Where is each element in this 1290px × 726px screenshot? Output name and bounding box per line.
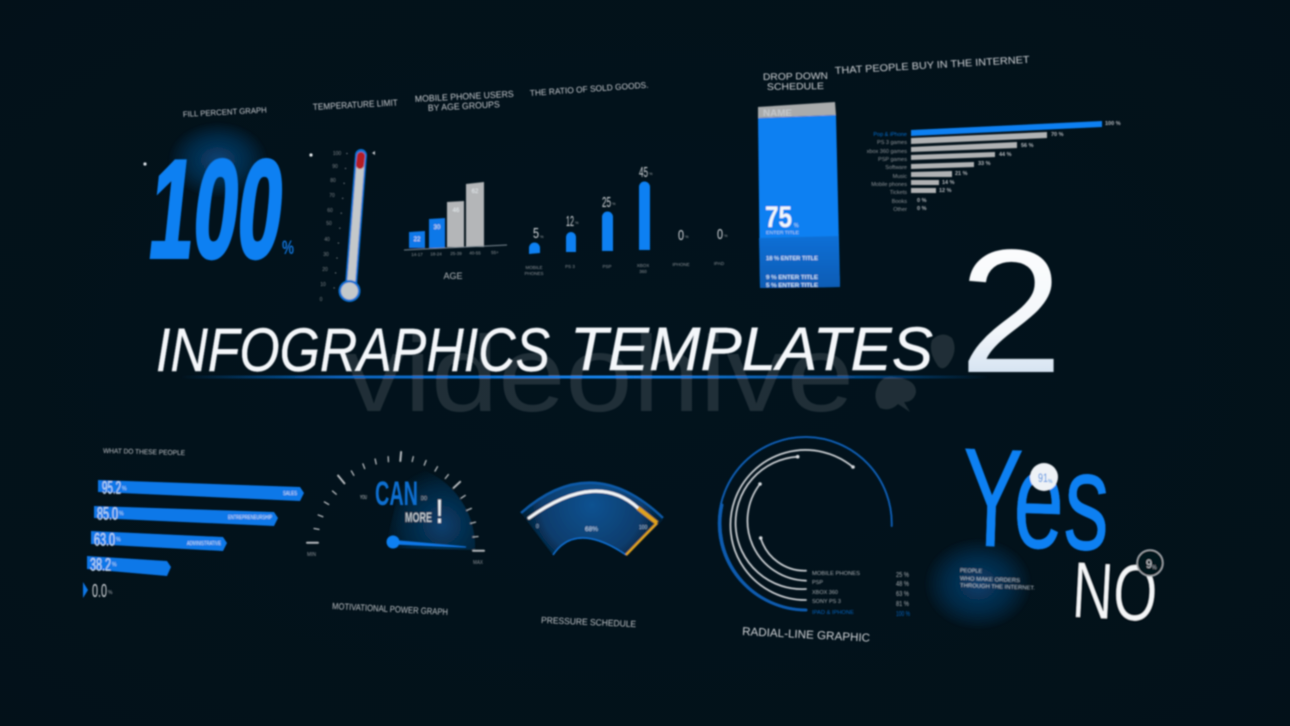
- chart: horizontal bars of purchases: PS 3 games: [877, 140, 907, 146]
- gauge: motivational power: MIN: [307, 552, 316, 558]
- gauge: pressure: 68%: [585, 527, 599, 533]
- chart: sold goods bars: 360: [639, 269, 647, 274]
- panel: thermometer: 60: [327, 208, 333, 214]
- heading: mobile phone users: MOBILE PHONE USERS: [415, 89, 514, 104]
- chart: radial lines: 25 %: [896, 572, 909, 579]
- panel: thermometer: 70: [329, 193, 335, 199]
- chart: sold goods bars: %: [575, 220, 579, 225]
- chart: age groups bars: 55+: [491, 250, 499, 255]
- panel: thermometer: 40: [324, 237, 330, 243]
- chart: sold goods bars: PS 3: [565, 264, 575, 269]
- gauge: motivational power: !: [436, 493, 443, 531]
- chart: horizontal bars of purchases: Mobile phones: [871, 182, 907, 188]
- heading: drop down schedule: DROP DOWN: [763, 71, 828, 83]
- panel: thermometer: [309, 151, 375, 303]
- gauge: motivational power: MORE: [405, 509, 432, 525]
- heading: temperature limit: TEMPERATURE LIMIT: [313, 98, 398, 112]
- chart: arrow bars: %: [116, 537, 121, 543]
- panel: thermometer: 0: [320, 297, 323, 303]
- title: TEMPLATES: [570, 315, 933, 383]
- panel: thermometer: 90: [332, 164, 338, 170]
- chart: sold goods bars: XBOX: [637, 263, 649, 268]
- caption: radial-line graphic: RADIAL-LINE GRAPHIC: [742, 626, 870, 645]
- chart: arrow bars: 95.2: [102, 478, 121, 498]
- heading: that people buy in the internet: THAT PEOPLE BUY IN THE INTERNET: [835, 55, 1030, 77]
- gauge: pressure: 0: [536, 524, 539, 530]
- chart: horizontal bars of purchases: [867, 121, 1121, 213]
- chart: radial lines: [719, 437, 910, 618]
- panel: drop down schedule: [758, 102, 840, 289]
- chart: sold goods bars: [524, 164, 728, 276]
- chart: horizontal bars of purchases: 56 %: [1021, 143, 1034, 149]
- chart: age groups bars: 25-39: [450, 251, 462, 256]
- panel: drop down schedule: %: [794, 223, 799, 229]
- gauge: pressure: 100: [639, 525, 648, 531]
- chart: sold goods bars: %: [649, 171, 653, 176]
- chart: arrow bars: ENTREPRENEURSHIP: [228, 515, 273, 521]
- chart: horizontal bars of purchases: Software: [885, 165, 907, 171]
- panel: thermometer: 50: [326, 221, 332, 227]
- caption: pressure schedule: PRESSURE SCHEDULE: [541, 615, 636, 629]
- panel: yes and no: %: [1048, 479, 1053, 485]
- panel: yes and no: 91: [1038, 471, 1048, 485]
- chart: arrow bars: 85.0: [97, 504, 118, 524]
- chart: arrow bars: 38.2: [90, 555, 111, 575]
- heading: what do these people: WHAT DO THESE PEOPLE: [103, 448, 185, 457]
- chart: arrow bars: [83, 478, 304, 601]
- chart: horizontal bars of purchases: 33 %: [978, 161, 991, 167]
- chart: arrow bars: %: [119, 511, 124, 517]
- panel: drop down schedule: 75: [765, 201, 792, 234]
- panel: yes and no: PEOPLE: [960, 568, 982, 575]
- chart: horizontal bars of purchases: PSP games: [878, 157, 907, 163]
- panel: fill percent graph: %: [282, 238, 294, 259]
- chart: arrow bars: %: [122, 486, 127, 492]
- panel: yes and no: WHO MAKE ORDERS: [960, 576, 1020, 584]
- chart: age groups bars: 40-55: [469, 250, 481, 256]
- chart: age groups bars: 30: [434, 225, 441, 231]
- chart: age groups bars: 22: [414, 237, 421, 243]
- panel: yes and no: THROUGH THE INTERNET.: [960, 583, 1036, 592]
- chart: sold goods bars: IPHONE: [672, 262, 690, 267]
- panel: drop down schedule: NAME: [763, 108, 792, 118]
- heading: ratio of sold goods: THE RATIO OF SOLD GOODS.: [529, 80, 649, 98]
- panel: fill percent graph: [143, 122, 294, 287]
- heading: fill percent graph: FILL PERCENT GRAPH: [183, 106, 267, 119]
- chart: arrow bars: SALES: [283, 491, 298, 497]
- panel: thermometer: 10: [320, 282, 326, 288]
- panel: thermometer: 100: [333, 151, 341, 157]
- chart: age groups bars: AGE: [443, 271, 463, 281]
- title underline: [180, 376, 990, 378]
- panel: yes and no: Yes: [959, 418, 1112, 580]
- chart: sold goods bars: %: [612, 201, 616, 206]
- chart: horizontal bars of purchases: 0 %: [917, 206, 927, 212]
- chart: horizontal bars of purchases: Tickets: [890, 190, 907, 196]
- gauge: pressure: [521, 482, 663, 555]
- panel: drop down schedule: 9 % ENTER TITLE: [766, 275, 818, 281]
- heading: mobile phone users: BY AGE GROUPS: [428, 99, 500, 113]
- chart: age groups bars: 46: [453, 208, 460, 214]
- chart: age groups bars: 14-17: [411, 252, 423, 257]
- heading: drop down schedule: SCHEDULE: [767, 81, 824, 93]
- chart: radial lines: 63 %: [896, 591, 909, 598]
- chart: sold goods bars: %: [724, 233, 728, 238]
- panel: fill percent graph: 100: [143, 131, 291, 287]
- panel: drop down schedule: 18 % ENTER TITLE: [766, 256, 818, 262]
- chart: age groups bars: 62: [472, 189, 479, 195]
- chart: horizontal bars of purchases: 44 %: [999, 152, 1012, 158]
- title: [156, 315, 933, 384]
- chart: sold goods bars: MOBILE: [525, 265, 543, 270]
- caption: motivational power graph: MOTIVATIONAL POWER GRAPH: [332, 601, 448, 617]
- chart: sold goods bars: PHONES: [524, 271, 544, 276]
- panel: drop down schedule: ENTER TITLE: [766, 230, 799, 235]
- title number: 2: [959, 214, 1063, 410]
- chart: sold goods bars: 5: [533, 225, 539, 242]
- chart: horizontal bars of purchases: 21 %: [955, 171, 968, 177]
- chart: sold goods bars: %: [540, 234, 544, 239]
- chart: horizontal bars of purchases: 0 %: [917, 198, 927, 204]
- chart: sold goods bars: 0: [717, 226, 723, 243]
- chart: horizontal bars of purchases: 12 %: [939, 188, 952, 194]
- panel: yes and no: NO: [1070, 545, 1160, 638]
- chart: radial lines: XBOX 360: [812, 590, 838, 596]
- chart: horizontal bars of purchases: Music: [893, 174, 907, 180]
- chart: sold goods bars: 12: [566, 213, 574, 230]
- panel: yes and no: [924, 418, 1163, 638]
- chart: radial lines: 48 %: [896, 581, 909, 588]
- heading: mobile phone users: [415, 89, 514, 113]
- chart: radial lines: 100 %: [896, 611, 910, 618]
- chart: arrow bars: %: [108, 590, 113, 596]
- chart: arrow bars: ADMINISTRATIVE: [187, 541, 222, 547]
- gauge: motivational power: DO: [421, 496, 427, 502]
- chart: horizontal bars of purchases: Books: [892, 199, 907, 205]
- gauge: motivational power: YOU: [360, 495, 367, 501]
- chart: arrow bars: 63.0: [94, 530, 115, 550]
- heading: drop down schedule: [763, 71, 828, 93]
- panel: drop down schedule: 5 % ENTER TITLE: [766, 283, 818, 289]
- chart: horizontal bars of purchases: xbox 360 games: [867, 149, 907, 155]
- chart: horizontal bars of purchases: 100 %: [1105, 121, 1121, 127]
- chart: arrow bars: 0.0: [92, 581, 107, 601]
- chart: radial lines: PSP: [812, 580, 823, 586]
- chart: horizontal bars of purchases: 14 %: [942, 180, 955, 186]
- chart: sold goods bars: 45: [639, 164, 648, 181]
- gauge: motivational power: [307, 452, 484, 566]
- chart: horizontal bars of purchases: Pop & iPhone: [873, 132, 907, 138]
- chart: age groups bars: 18-24: [430, 252, 442, 256]
- chart: horizontal bars of purchases: 70 %: [1051, 132, 1064, 138]
- chart: radial lines: IPAD & IPHONE: [812, 610, 854, 616]
- chart: radial lines: SONY PS 3: [812, 599, 841, 605]
- panel: thermometer: 20: [322, 267, 328, 273]
- chart: sold goods bars: 0: [678, 227, 684, 244]
- chart: arrow bars: %: [112, 562, 117, 568]
- chart: radial lines: 81 %: [896, 601, 909, 608]
- chart: sold goods bars: IPAD: [714, 261, 725, 266]
- chart: sold goods bars: PSP: [602, 264, 612, 269]
- chart: sold goods bars: %: [685, 234, 689, 239]
- gauge: motivational power: MAX: [473, 560, 484, 566]
- chart: age groups bars: [404, 182, 507, 281]
- gauge: motivational power: CAN: [375, 475, 418, 513]
- panel: thermometer: 30: [323, 252, 329, 258]
- chart: sold goods bars: 25: [602, 194, 611, 211]
- title: INFOGRAPHICS: [156, 316, 550, 384]
- chart: radial lines: MOBILE PHONES: [812, 571, 860, 577]
- panel: yes and no: 9: [1146, 557, 1152, 571]
- chart: horizontal bars of purchases: Other: [893, 207, 907, 213]
- panel: thermometer: 80: [330, 178, 336, 184]
- panel: yes and no: %: [1152, 565, 1157, 571]
- watermark: videohive: [344, 313, 854, 434]
